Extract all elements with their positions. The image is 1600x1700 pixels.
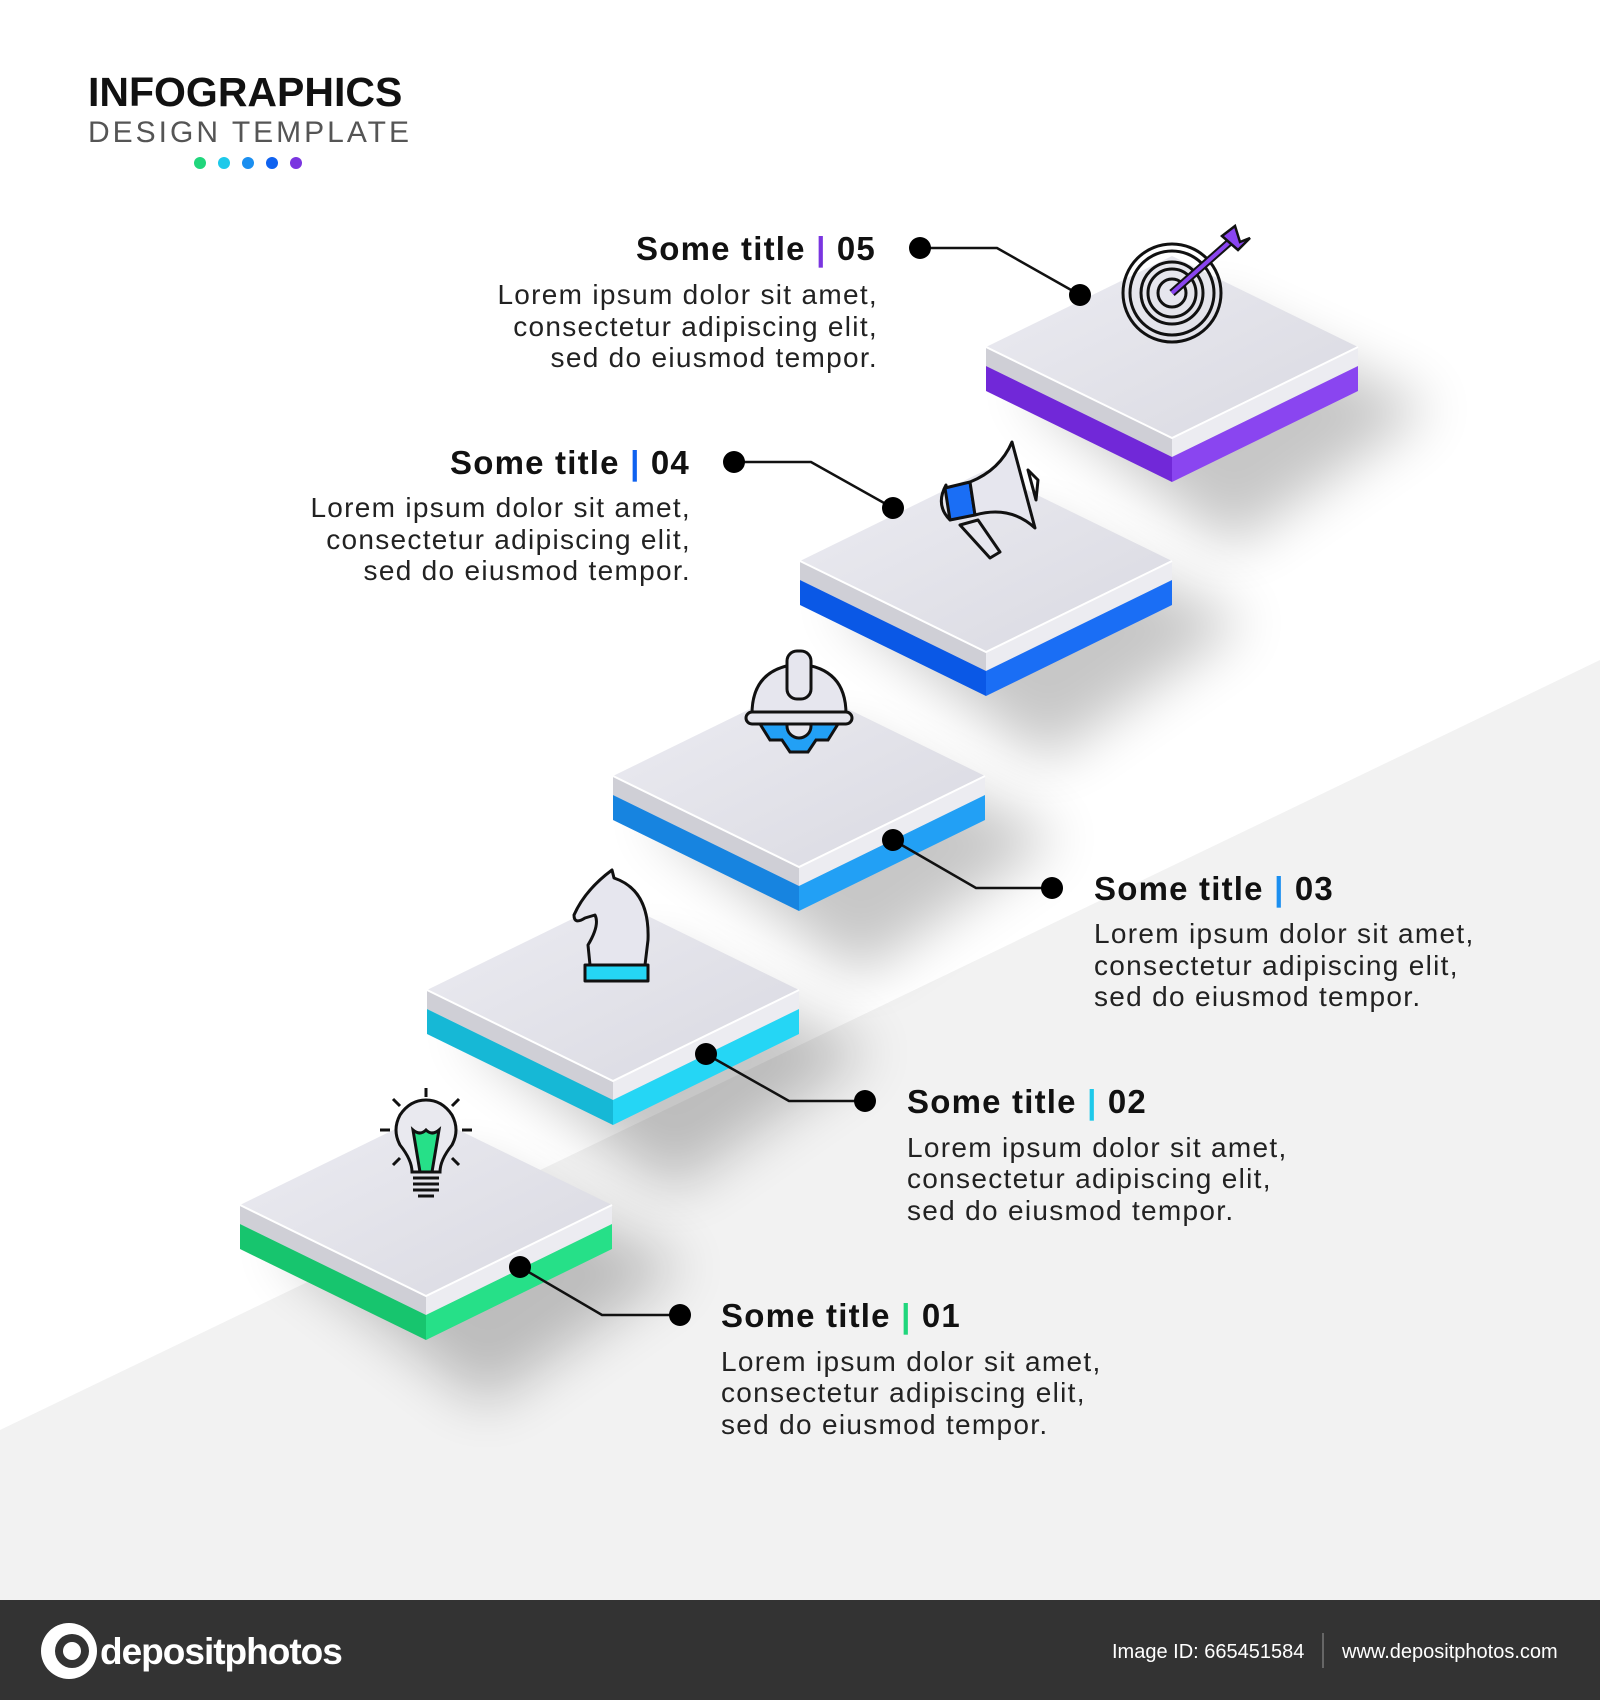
text: step 01: consectetur adipiscing elit, <box>721 1377 1086 1408</box>
platform 01 <box>240 1114 686 1405</box>
text: step 04 <box>310 444 691 586</box>
text: step 04: Lorem ipsum dolor sit amet, <box>310 492 691 523</box>
platform 04 <box>800 470 1246 761</box>
title: DESIGN TEMPLATE <box>88 116 412 149</box>
platform 02 <box>427 899 873 1190</box>
text: step 01: Lorem ipsum dolor sit amet, <box>721 1346 1102 1377</box>
text: step 02: sed do eiusmod tempor. <box>907 1195 1234 1226</box>
icon: megaphone <box>941 442 1038 558</box>
text: step 03 <box>1094 870 1475 1012</box>
icon: knight <box>574 870 648 981</box>
text: step 02: consectetur adipiscing elit, <box>907 1163 1272 1194</box>
connectors <box>520 248 1080 1315</box>
text: step 03: sed do eiusmod tempor. <box>1094 981 1421 1012</box>
platform 05 <box>986 256 1432 547</box>
footer bar: depositphotos <box>100 1631 342 1672</box>
text: step 03: Lorem ipsum dolor sit amet, <box>1094 918 1475 949</box>
text: step 04: consectetur adipiscing elit, <box>326 524 691 555</box>
text: step 05: Some title | 05 <box>636 230 876 267</box>
text: step 02: Some title | 02 <box>907 1083 1147 1120</box>
text: step 05: sed do eiusmod tempor. <box>551 342 878 373</box>
text: step 01 <box>721 1297 1102 1440</box>
text: step 05 <box>497 230 878 373</box>
footer bar: www.depositphotos.com <box>1341 1641 1558 1663</box>
icon: light bulb <box>380 1088 472 1196</box>
footer bar <box>0 1600 1600 1700</box>
text: step 02: Lorem ipsum dolor sit amet, <box>907 1132 1288 1163</box>
text: step 04: sed do eiusmod tempor. <box>364 555 691 586</box>
title <box>88 69 412 169</box>
platform 03 <box>613 685 1059 976</box>
text: step 01: sed do eiusmod tempor. <box>721 1409 1048 1440</box>
icon: target <box>1123 226 1250 342</box>
footer bar: Image ID: 665451584 <box>1112 1641 1304 1663</box>
text: step 02 <box>907 1083 1288 1226</box>
title: INFOGRAPHICS <box>88 69 402 115</box>
text: step 04: Some title | 04 <box>450 444 690 481</box>
text: step 03: Some title | 03 <box>1094 870 1334 907</box>
icon: helmet with gear <box>746 651 852 752</box>
text: step 03: consectetur adipiscing elit, <box>1094 950 1459 981</box>
text: step 01: Some title | 01 <box>721 1297 961 1334</box>
text: step 05: Lorem ipsum dolor sit amet, <box>497 279 878 310</box>
text: step 05: consectetur adipiscing elit, <box>513 311 878 342</box>
